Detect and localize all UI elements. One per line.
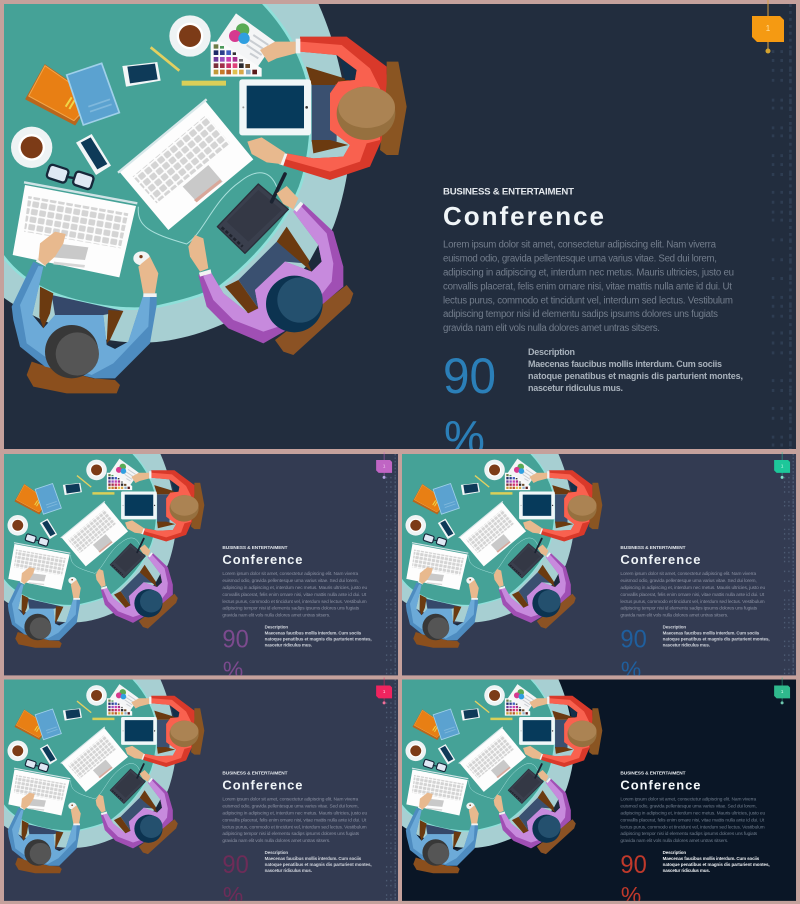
body text: gravida nam elit vols nulla dolores amet untras sitsers. <box>222 613 330 619</box>
body text: adipiscing tempor nisi id elementu sadips ipsums dolores uns fugiats <box>443 309 718 320</box>
title: Conference <box>222 777 303 792</box>
panel: dark navy variant <box>400 678 796 904</box>
body text <box>443 240 734 334</box>
description: nascetur ridiculus mus. <box>528 383 623 393</box>
subheading: BUSINESS & ENTERTAIMENT <box>443 186 574 198</box>
description: nascetur ridiculus mus. <box>663 643 710 648</box>
body text: Lorem ipsum dolor sit amet, consectetur adipiscing elit. Nam viverra <box>443 240 717 250</box>
page tab: 1 <box>383 463 386 468</box>
panel: pink tab variant <box>2 678 398 904</box>
description: natoque penatibus et magnis dis parturient montes, <box>528 371 743 381</box>
body text: convallis placerat, felis enim ornare nisi, vitae mattis nulla ante id dui. Ut <box>443 282 732 292</box>
body text <box>620 797 765 844</box>
body text <box>222 797 367 844</box>
description: Description <box>265 850 288 855</box>
body text: euismod odio, gravida pellentesque urna varius vitae. Sed dui lorem, <box>443 254 717 264</box>
body text: adipiscing tempor nisi id elementu sadips ipsums dolores uns fugiats <box>222 606 360 612</box>
body text: adipiscing in adipiscing et, interdum nec metus. Mauris ultricies, justo eu <box>620 585 765 591</box>
illustration <box>400 452 602 648</box>
description: Description <box>528 347 575 357</box>
body text: Lorem ipsum dolor sit amet, consectetur adipiscing elit. Nam viverra <box>620 797 757 803</box>
panel: purple variant <box>2 452 398 682</box>
statistic: 90 <box>222 851 249 879</box>
description: Maecenas faucibus mollis interdum. Cum sociis <box>663 856 760 861</box>
body text: Lorem ipsum dolor sit amet, consectetur adipiscing elit. Nam viverra <box>222 797 359 803</box>
body text: gravida nam elit vols nulla dolores amet untras sitsers. <box>443 323 660 334</box>
body text <box>222 571 367 619</box>
description: Description <box>663 625 686 630</box>
decorative dot column <box>784 454 796 675</box>
body text: adipiscing tempor nisi id elementu sadips ipsums dolores uns fugiats <box>620 606 758 612</box>
description: natoque penatibus et magnis dis parturient montes, <box>663 862 770 867</box>
description: Maecenas faucibus mollis interdum. Cum sociis <box>265 856 362 861</box>
body text: adipiscing in adipiscing et, interdum nec metus. Mauris ultricies, justo eu <box>222 585 367 591</box>
page tab <box>774 678 790 704</box>
title: Conference <box>620 552 701 567</box>
subheading: BUSINESS & ENTERTAIMENT <box>222 545 288 551</box>
statistic: % <box>223 656 243 682</box>
body text: convallis placerat, felis enim ornare nisi, vitae mattis nulla ante id dui. Ut <box>222 592 367 598</box>
statistic: % <box>621 656 641 682</box>
description: Maecenas faucibus mollis interdum. Cum sociis <box>663 631 760 636</box>
title: Conference <box>620 777 701 792</box>
page tab: 1 <box>766 24 771 33</box>
body text: convallis placerat, felis enim ornare nisi, vitae mattis nulla ante id dui. Ut <box>222 818 367 824</box>
body text: lectus purus, commodo et tincidunt vel, interdum sed lectus. Vestibulum <box>620 825 765 831</box>
description: natoque penatibus et magnis dis parturient montes, <box>265 862 372 867</box>
body text: lectus purus, commodo et tincidunt vel, interdum sed lectus. Vestibulum <box>620 599 765 605</box>
body text: euismod odio, gravida pellentesque urna varius vitae. Sed dui lorem, <box>222 578 359 584</box>
body text: adipiscing tempor nisi id elementu sadips ipsums dolores uns fugiats <box>222 831 360 837</box>
body text: adipiscing in adipiscing et, interdum nec metus. Mauris ultricies, justo eu <box>443 268 734 278</box>
description <box>663 850 770 873</box>
body text <box>620 571 765 619</box>
body text: euismod odio, gravida pellentesque urna varius vitae. Sed dui lorem, <box>222 804 359 810</box>
body text: adipiscing in adipiscing et, interdum nec metus. Mauris ultricies, justo eu <box>620 811 765 817</box>
description: natoque penatibus et magnis dis parturient montes, <box>663 637 770 642</box>
illustration <box>2 678 204 873</box>
statistic: % <box>444 411 485 463</box>
decorative dot column <box>386 680 398 901</box>
statistic: 90 <box>620 851 647 879</box>
title: Conference <box>222 552 303 567</box>
body text: lectus purus, commodo et tincidunt vel, interdum sed lectus. Vestibulum <box>222 599 367 605</box>
decorative dot column <box>386 454 398 675</box>
panel: green tab variant <box>400 452 796 682</box>
body text: lectus purus, commodo et tincidunt vel, interdum sed lectus. Vestibulum <box>222 825 367 831</box>
page tab <box>376 678 392 704</box>
subheading: BUSINESS & ENTERTAIMENT <box>222 770 288 776</box>
illustration <box>2 452 204 648</box>
statistic <box>445 358 494 449</box>
statistic <box>622 855 646 901</box>
page tab <box>752 0 784 54</box>
page tab: 1 <box>781 463 784 468</box>
body text: convallis placerat, felis enim ornare nisi, vitae mattis nulla ante id dui. Ut <box>620 818 765 824</box>
description: Description <box>265 625 288 630</box>
title: Conference <box>443 201 604 231</box>
page tab <box>376 452 392 479</box>
body text: euismod odio, gravida pellentesque urna varius vitae. Sed dui lorem, <box>620 804 757 810</box>
description <box>663 625 770 648</box>
statistic: 90 <box>222 626 249 654</box>
body text: Lorem ipsum dolor sit amet, consectetur adipiscing elit. Nam viverra <box>620 571 757 577</box>
description: Maecenas faucibus mollis interdum. Cum sociis <box>528 359 722 369</box>
body text: gravida nam elit vols nulla dolores amet untras sitsers. <box>620 838 728 844</box>
panel: main slide <box>0 0 796 463</box>
statistic <box>622 630 646 676</box>
subheading: BUSINESS & ENTERTAIMENT <box>620 545 686 551</box>
page tab: 1 <box>383 689 386 694</box>
body text: euismod odio, gravida pellentesque urna varius vitae. Sed dui lorem, <box>620 578 757 584</box>
illustration: four people around a table <box>0 0 407 393</box>
description <box>265 850 372 873</box>
illustration <box>400 678 602 873</box>
statistic <box>224 630 248 676</box>
decorative dot column <box>772 4 796 449</box>
statistic: 90 <box>443 348 496 404</box>
description: nascetur ridiculus mus. <box>265 868 312 873</box>
description: natoque penatibus et magnis dis parturient montes, <box>265 637 372 642</box>
body text: gravida nam elit vols nulla dolores amet untras sitsers. <box>620 613 728 619</box>
description: nascetur ridiculus mus. <box>265 643 312 648</box>
description <box>528 347 743 393</box>
body text: Lorem ipsum dolor sit amet, consectetur adipiscing elit. Nam viverra <box>222 571 359 577</box>
body text: adipiscing tempor nisi id elementu sadips ipsums dolores uns fugiats <box>620 831 758 837</box>
page tab <box>774 452 790 479</box>
page tab: 1 <box>781 689 784 694</box>
description: nascetur ridiculus mus. <box>663 868 710 873</box>
body text: convallis placerat, felis enim ornare nisi, vitae mattis nulla ante id dui. Ut <box>620 592 765 598</box>
description: Maecenas faucibus mollis interdum. Cum sociis <box>265 631 362 636</box>
statistic <box>224 855 248 901</box>
description: Description <box>663 850 686 855</box>
statistic: 90 <box>620 626 647 654</box>
body text: gravida nam elit vols nulla dolores amet untras sitsers. <box>222 838 330 844</box>
body text: lectus purus, commodo et tincidunt vel, interdum sed lectus. Vestibulum <box>443 296 733 306</box>
subheading: BUSINESS & ENTERTAIMENT <box>620 770 686 776</box>
description <box>265 625 372 648</box>
body text: adipiscing in adipiscing et, interdum nec metus. Mauris ultricies, justo eu <box>222 811 367 817</box>
